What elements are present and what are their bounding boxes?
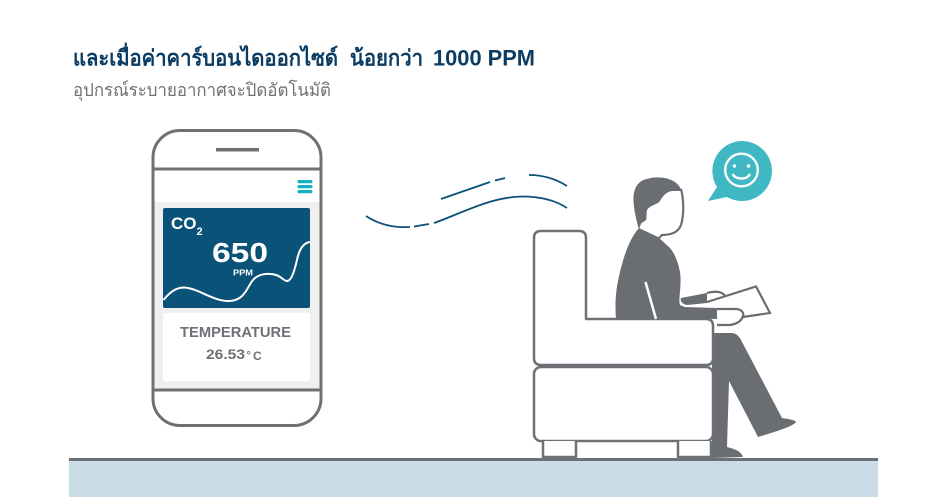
person legs xyxy=(712,333,796,458)
chair legs xyxy=(543,441,576,457)
airflow lines xyxy=(366,175,567,227)
speech bubble with smiley xyxy=(708,141,772,201)
temperature card: ° xyxy=(246,350,251,362)
menu icon xyxy=(298,180,312,193)
smiley xyxy=(725,154,758,186)
title: และเมื่อค่าคาร์บอนไดออกไซด์ xyxy=(73,42,338,70)
armchair xyxy=(534,231,713,457)
phone body xyxy=(153,130,321,426)
temperature card: 26.53 xyxy=(206,346,245,362)
temperature card xyxy=(163,313,310,381)
temperature card: TEMPERATURE xyxy=(180,325,291,341)
phone speaker xyxy=(216,148,259,152)
face outline xyxy=(659,189,683,238)
floor xyxy=(69,458,878,497)
title: 1000 PPM xyxy=(433,46,535,70)
CO2 card xyxy=(163,208,310,308)
title xyxy=(73,42,535,70)
CO2 label: 2 xyxy=(196,226,203,238)
smartphone xyxy=(153,130,321,426)
torso xyxy=(615,228,717,319)
chair seat xyxy=(534,367,713,441)
CO2 value: 650 xyxy=(212,237,268,268)
hair xyxy=(633,177,682,229)
person xyxy=(615,177,770,325)
CO2 trend line xyxy=(164,242,310,301)
title: น้อยกว่า xyxy=(350,46,423,70)
PPM unit: PPM xyxy=(233,268,253,278)
subtitle: อุปกรณ์ระบายอากาศจะปิดอัตโนมัติ xyxy=(73,79,331,101)
temperature card: C xyxy=(253,349,262,363)
arm line xyxy=(646,282,656,319)
chair backrest and arm xyxy=(534,231,713,365)
upper hand xyxy=(681,293,707,305)
phone screen background xyxy=(154,202,320,389)
book xyxy=(707,286,770,317)
lower hand xyxy=(717,309,743,325)
CO2 label: CO xyxy=(171,214,196,233)
